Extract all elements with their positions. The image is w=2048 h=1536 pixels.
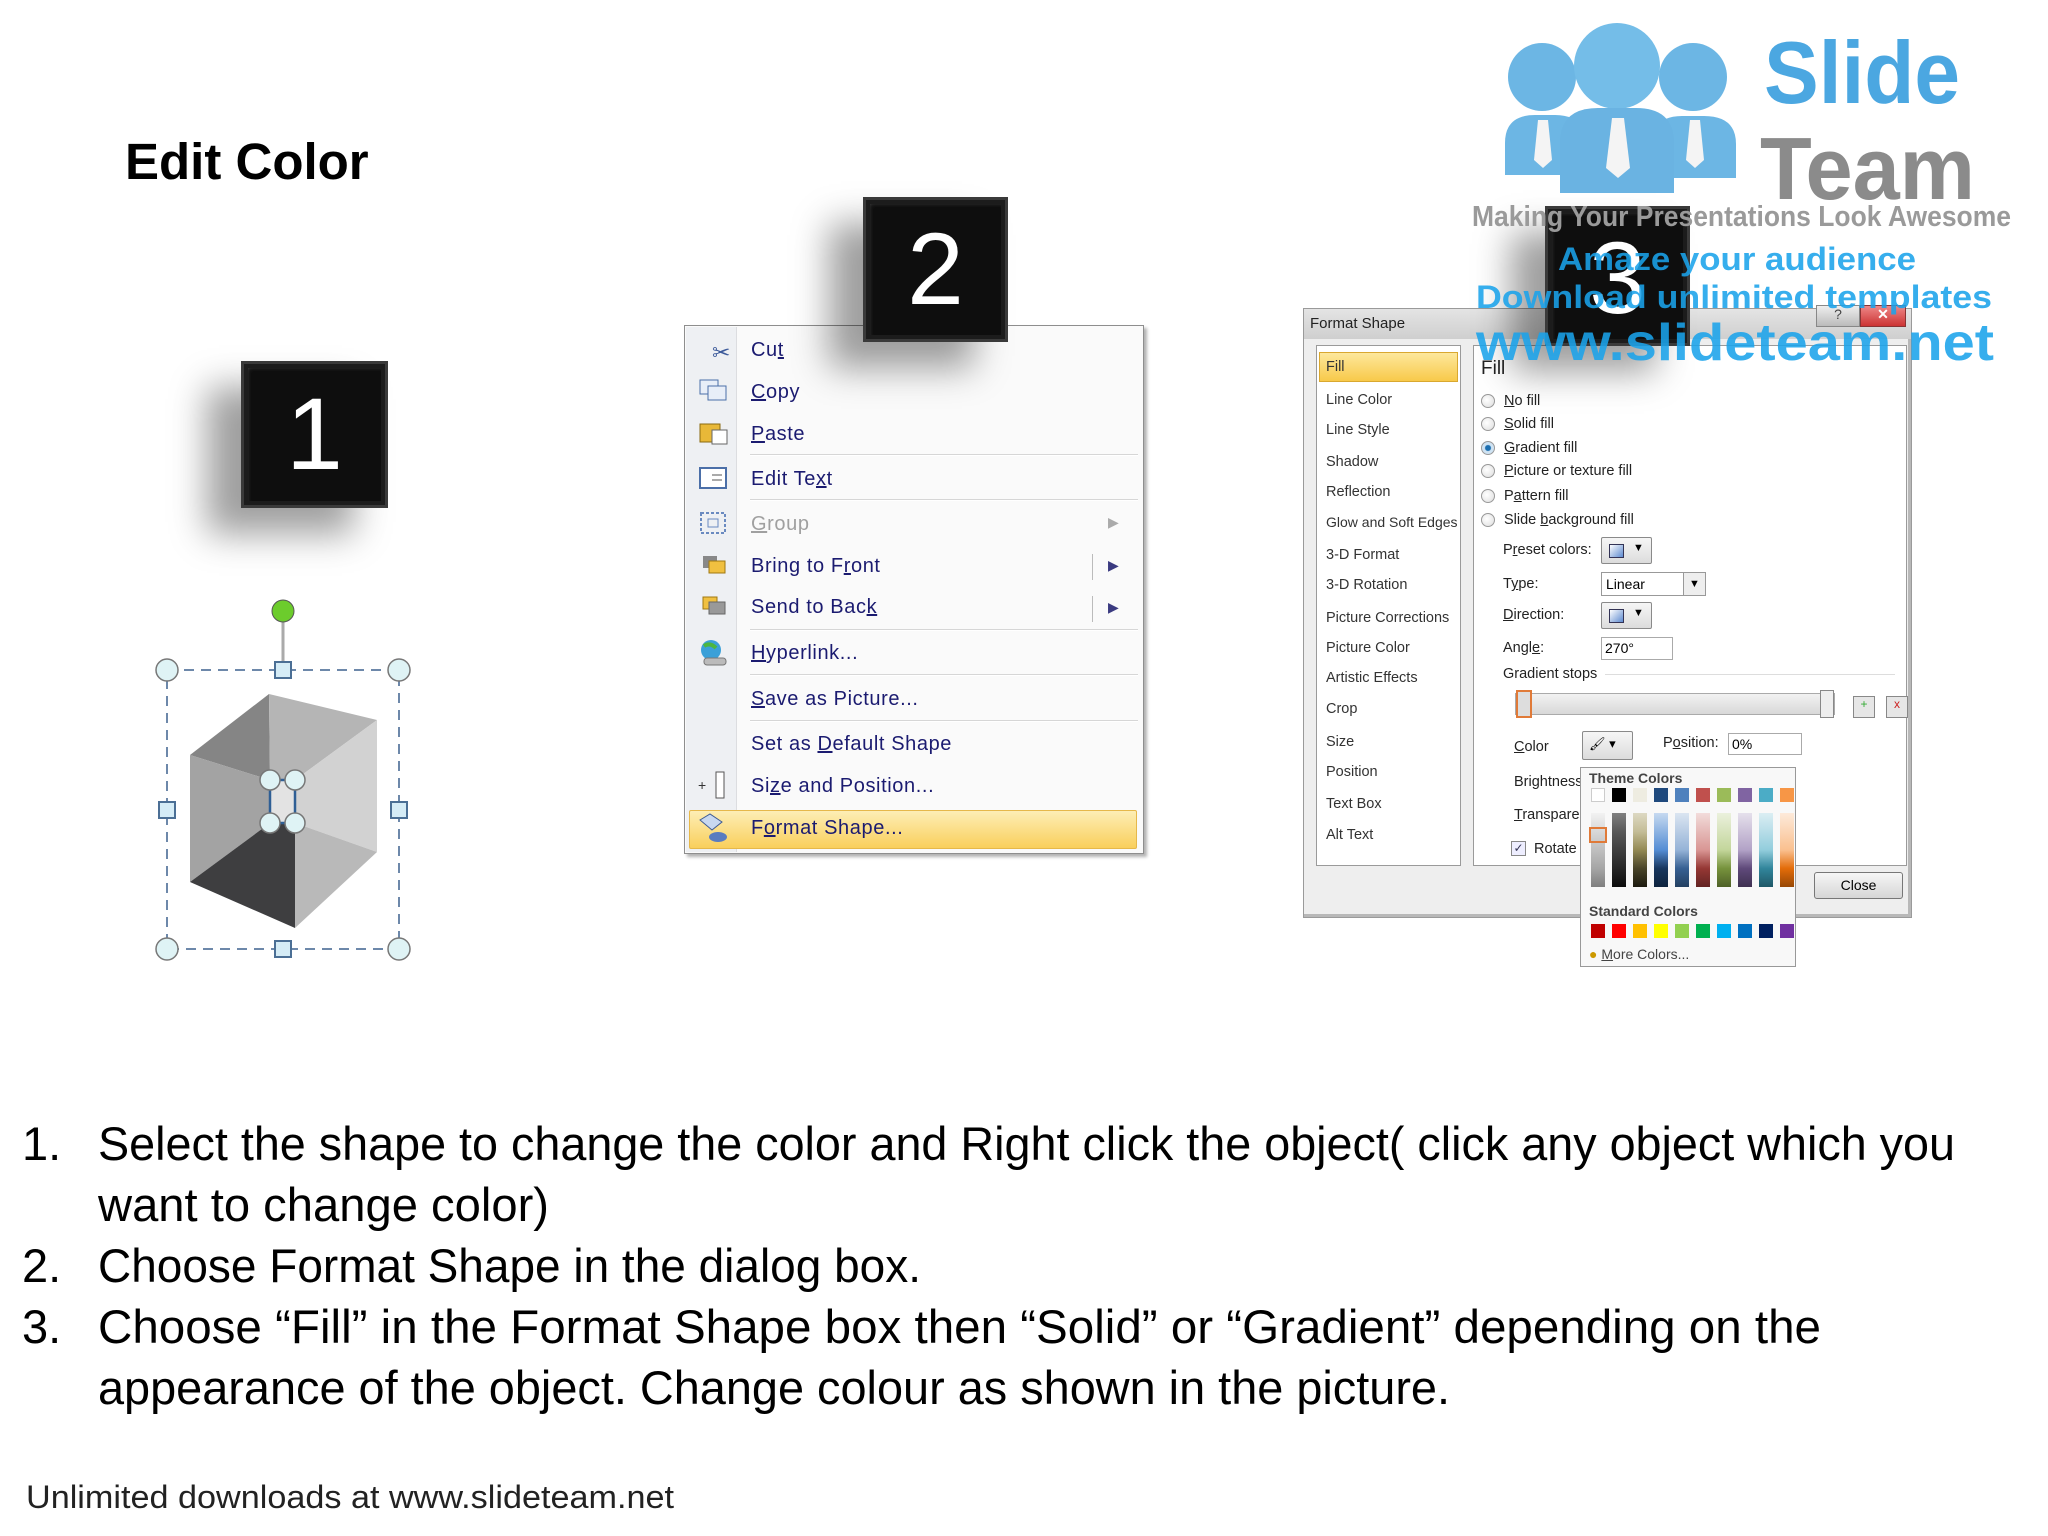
text: Solid fill xyxy=(1504,416,1554,432)
menu items: Bring to Front xyxy=(751,555,881,577)
logo wordmark xyxy=(1472,23,2011,233)
right fill pane xyxy=(1473,345,1907,866)
shape: selected cube xyxy=(155,600,411,961)
dialog title bar xyxy=(1304,309,1911,339)
text: Transparen xyxy=(1514,807,1588,823)
text: Direction: xyxy=(1503,607,1564,623)
instructions: 2. xyxy=(22,1239,61,1292)
text: Type: xyxy=(1503,576,1538,592)
text: + xyxy=(1860,697,1868,711)
logo wordmark: Team xyxy=(1760,119,1975,218)
step box 2 xyxy=(863,197,1008,342)
text: Position xyxy=(1326,764,1378,780)
menu items: Send to Back xyxy=(751,596,877,618)
text: Rotate w xyxy=(1534,841,1591,857)
help/close buttons: ? xyxy=(1834,306,1842,322)
icon: people xyxy=(1505,23,1736,193)
step box 1 xyxy=(241,361,388,508)
menu items: Set as Default Shape xyxy=(751,733,952,755)
instructions: Choose Format Shape in the dialog box. xyxy=(98,1239,921,1292)
text: x xyxy=(1894,697,1900,711)
text: 3-D Rotation xyxy=(1326,577,1407,593)
text: Picture Corrections xyxy=(1326,610,1449,626)
color palette popup: Standard Colors xyxy=(1589,903,1698,919)
menu items: Group xyxy=(751,513,810,535)
text: 0% xyxy=(1732,736,1752,752)
left category pane xyxy=(1316,345,1461,866)
format shape dialog xyxy=(1303,308,1912,918)
close button: Close xyxy=(1841,877,1876,893)
help/close buttons xyxy=(1816,305,1860,327)
logo wordmark: Making Your Presentations Look Awesome xyxy=(1472,201,2011,233)
text: Color xyxy=(1514,739,1549,755)
tagline xyxy=(1475,241,1994,372)
menu items: Size and Position... xyxy=(751,775,934,797)
format shape dialog: ✕ xyxy=(1877,306,1889,322)
color palette popup: ● More Colors... xyxy=(1589,946,1689,962)
menu items: Edit Text xyxy=(751,468,833,490)
cube faces xyxy=(190,694,377,928)
text: Linear xyxy=(1606,576,1645,592)
text: Glow and Soft Edges xyxy=(1326,514,1458,530)
text: Alt Text xyxy=(1326,827,1373,843)
text: Gradient stops xyxy=(1503,666,1597,682)
text: ✓ xyxy=(1513,841,1524,855)
context menu xyxy=(684,325,1144,854)
step box 3: 3 xyxy=(1589,221,1646,335)
logo: slide team xyxy=(1472,23,2011,372)
menu items xyxy=(750,339,1138,839)
instructions: Choose “Fill” in the Format Shape box then “Solid” or “Gradient” depending on the xyxy=(98,1300,1821,1353)
text: Shadow xyxy=(1326,454,1378,470)
text: Picture or texture fill xyxy=(1504,463,1632,479)
text: Artistic Effects xyxy=(1326,670,1418,686)
text: ▼ xyxy=(1633,542,1644,554)
text: Crop xyxy=(1326,701,1357,717)
text: Brightness xyxy=(1514,774,1583,790)
text: Line Color xyxy=(1326,392,1392,408)
menu highlight: format shape xyxy=(689,810,1137,849)
gradient slider xyxy=(1515,693,1835,715)
menu items: ▶ xyxy=(1108,557,1119,573)
text: 3-D Format xyxy=(1326,547,1399,563)
text: Line Style xyxy=(1326,422,1390,438)
instructions: 3. xyxy=(22,1300,61,1353)
text: 270° xyxy=(1605,640,1634,656)
menu items: Format Shape... xyxy=(751,817,903,839)
instructions: 1. xyxy=(22,1117,61,1170)
text: Text Box xyxy=(1326,796,1382,812)
text: 🖌 ▾ xyxy=(1589,736,1616,751)
text: Gradient fill xyxy=(1504,440,1577,456)
text: Picture Color xyxy=(1326,640,1410,656)
menu icons: + xyxy=(698,777,706,793)
tagline: Amaze your audience xyxy=(1558,241,1916,277)
selection frame xyxy=(156,600,410,960)
color palette popup: Theme Colors xyxy=(1589,770,1682,786)
step box 3 xyxy=(1545,206,1690,346)
text: Position: xyxy=(1663,735,1719,751)
instructions: appearance of the object. Change colour as shown in the picture. xyxy=(98,1361,1450,1414)
menu items: Save as Picture... xyxy=(751,688,919,710)
text: Size xyxy=(1326,734,1354,750)
dialog title bar: Format Shape xyxy=(1310,315,1405,332)
menu icons: ✂ xyxy=(712,341,730,366)
icon column xyxy=(686,327,737,852)
text: ▼ xyxy=(1633,607,1644,619)
title: Edit Color xyxy=(125,133,369,190)
text: No fill xyxy=(1504,393,1540,409)
footer: Unlimited downloads at www.slideteam.net xyxy=(26,1479,674,1515)
menu items: Hyperlink... xyxy=(751,642,858,664)
text: Reflection xyxy=(1326,484,1390,500)
menu items: ▶ xyxy=(1108,599,1119,615)
menu items: ▶ xyxy=(1108,514,1119,530)
text: ▼ xyxy=(1689,578,1700,590)
tagline: www.slideteam.net xyxy=(1475,314,1994,372)
text: Fill xyxy=(1326,359,1345,375)
text: Preset colors: xyxy=(1503,542,1592,558)
tagline: Download unlimited templates xyxy=(1476,279,1992,315)
menu items: Paste xyxy=(751,423,805,445)
color palette popup xyxy=(1580,767,1796,967)
instructions xyxy=(22,1117,1955,1414)
text: Angle: xyxy=(1503,640,1544,656)
step box 2: 2 xyxy=(907,212,964,326)
text: Pattern fill xyxy=(1504,488,1568,504)
logo wordmark: Slide xyxy=(1764,23,1960,122)
close button xyxy=(1814,872,1903,899)
instructions: Select the shape to change the color and Right click the object( click any object which you xyxy=(98,1117,1955,1170)
text: Slide background fill xyxy=(1504,512,1634,528)
instructions: want to change color) xyxy=(97,1178,549,1231)
menu icons xyxy=(698,341,730,842)
step box 1: 1 xyxy=(286,377,343,491)
menu items: Copy xyxy=(751,381,800,403)
menu items: Cut xyxy=(751,339,784,361)
text: Fill xyxy=(1481,358,1505,379)
